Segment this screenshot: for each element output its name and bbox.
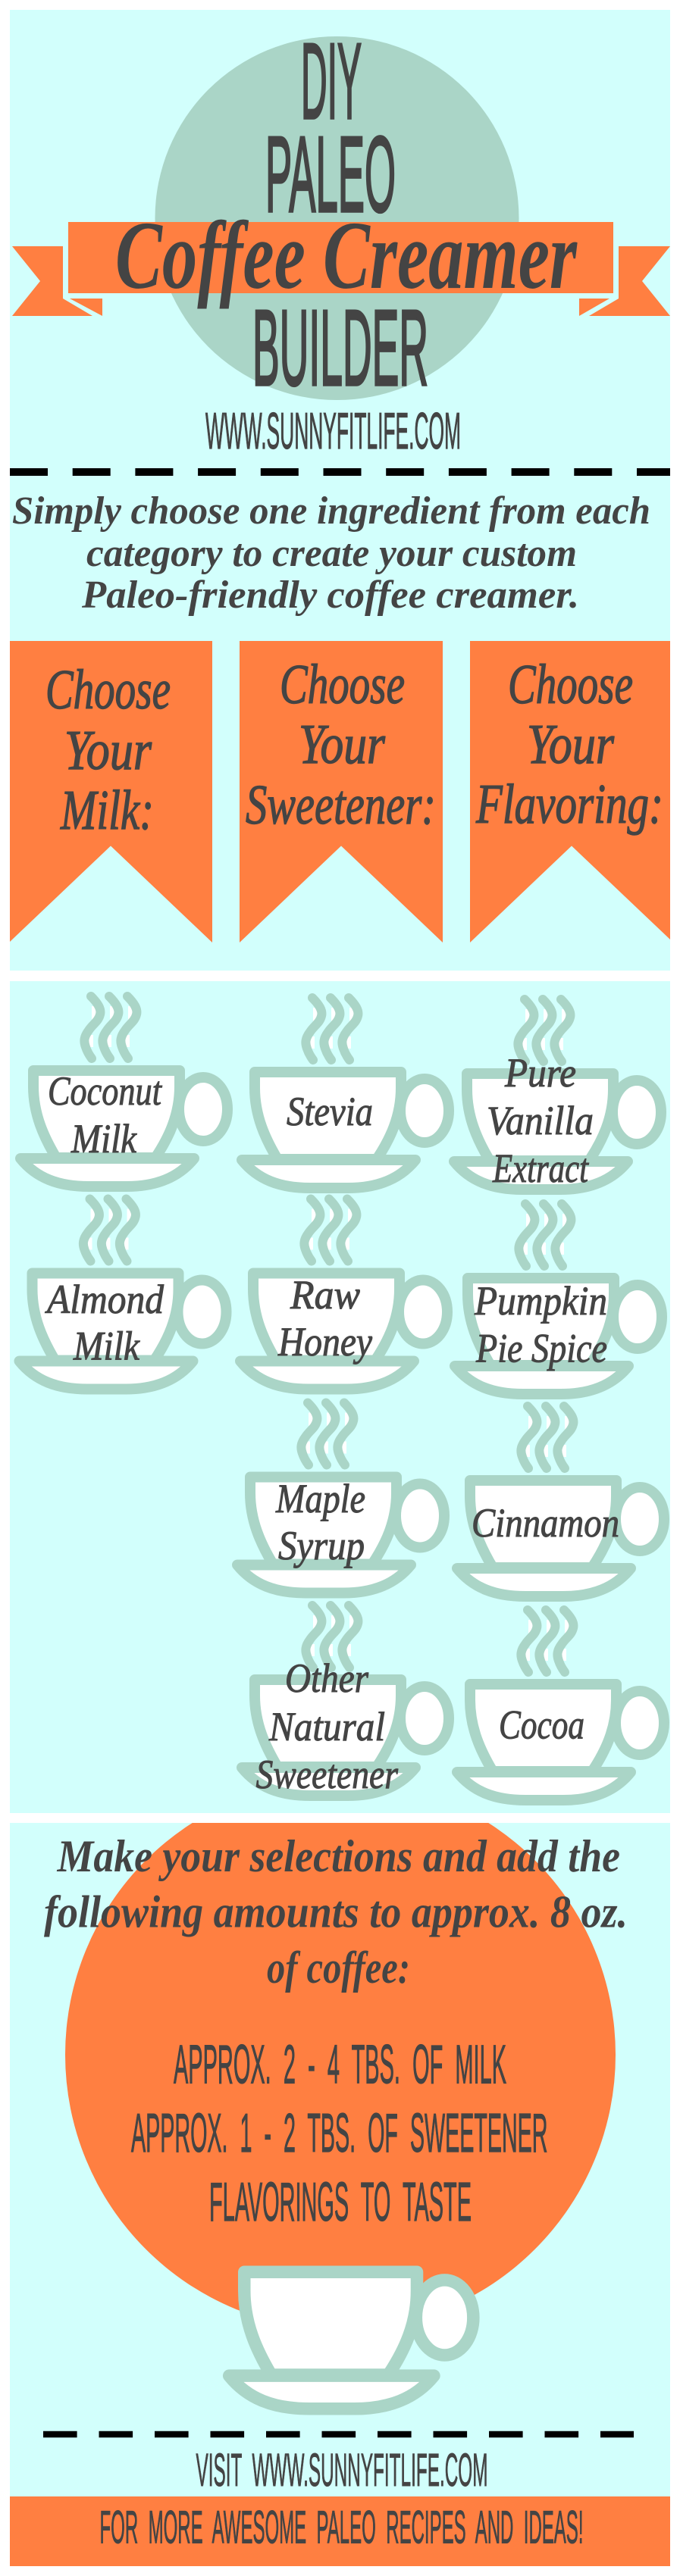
- cup: pure vanilla extract: Vanilla: [487, 1098, 594, 1143]
- cup: cinnamon: Cinnamon: [472, 1500, 619, 1546]
- cup: pure vanilla extract: [454, 999, 661, 1191]
- cup: cocoa: Cocoa: [499, 1702, 584, 1747]
- cup: pumpkin pie spice: Pie Spice: [475, 1326, 607, 1371]
- panel: header and category banners: PALEO: [265, 114, 396, 235]
- instructions text: of coffee:: [267, 1943, 410, 1993]
- banner: choose your flavoring: Choose: [508, 654, 633, 716]
- cup: maple syrup: Maple: [275, 1476, 365, 1521]
- panel: header and category banners: [10, 10, 670, 971]
- dashed divider: [43, 2431, 634, 2437]
- cup: pure vanilla extract: Extract: [492, 1146, 590, 1191]
- cup: stevia: Stevia: [287, 1089, 373, 1134]
- cup: almond milk: Almond: [45, 1277, 165, 1322]
- cup: pumpkin pie spice: [455, 1204, 662, 1394]
- cup: other natural sweetener: Natural: [268, 1704, 385, 1749]
- banner: choose your milk: Choose: [45, 659, 171, 721]
- banner: choose your sweetener: Your: [299, 714, 386, 776]
- cup: maple syrup: [237, 1403, 444, 1593]
- cup: other natural sweetener: [242, 1605, 449, 1797]
- intro text: category to create your custom: [86, 532, 577, 575]
- cup: coconut milk: Milk: [71, 1116, 137, 1161]
- instructions text: Make your selections and add the: [57, 1831, 620, 1881]
- banner: choose your milk: Milk:: [60, 780, 154, 842]
- intro text: Simply choose one ingredient from each: [12, 489, 650, 533]
- cup: cinnamon: [457, 1406, 664, 1596]
- orange circle: [65, 1823, 616, 2311]
- cup: pumpkin pie spice: Pumpkin: [474, 1278, 607, 1324]
- banner: choose your flavoring: [470, 641, 670, 943]
- footer bar: [10, 2496, 670, 2566]
- banner: choose your milk: [10, 641, 212, 943]
- banner: choose your sweetener: [240, 641, 443, 943]
- cup: raw honey: Honey: [277, 1319, 372, 1365]
- intro text: Paleo-friendly coffee creamer.: [81, 574, 579, 617]
- cup: almond milk: [20, 1199, 226, 1390]
- cup: almond milk: Milk: [73, 1323, 140, 1368]
- instructions text: following amounts to approx. 8 oz.: [44, 1887, 628, 1937]
- ribbon: main band: [68, 222, 613, 293]
- cup: coconut milk: Coconut: [48, 1068, 163, 1114]
- cup: other natural sweetener: Sweetener: [256, 1752, 399, 1797]
- ribbon: left tail: [12, 246, 102, 316]
- banner: choose your flavoring: Your: [527, 714, 615, 776]
- cup: other natural sweetener: Other: [285, 1655, 369, 1701]
- ribbon: right tail: [579, 246, 670, 316]
- instructions text: [44, 1831, 628, 1993]
- banner: choose your sweetener: Choose: [280, 654, 405, 716]
- panel: ingredient cups: [10, 981, 670, 1813]
- dashed divider: [10, 468, 670, 476]
- panel: header and category banners: DIY: [301, 21, 362, 142]
- cup: raw honey: [240, 1199, 447, 1390]
- cup: pure vanilla extract: Pure: [504, 1050, 576, 1096]
- banner: choose your sweetener: Sweetener:: [246, 774, 436, 836]
- intro text: [12, 489, 650, 617]
- title circle: [155, 36, 519, 400]
- cup: coconut milk: [20, 996, 227, 1186]
- large coffee cup: [229, 2272, 473, 2409]
- cup: cocoa: [457, 1610, 664, 1800]
- cup: maple syrup: Syrup: [278, 1523, 365, 1568]
- cup: raw honey: Raw: [290, 1272, 360, 1318]
- cup: stevia: [242, 998, 449, 1188]
- panel: amounts and footer: [10, 1780, 670, 2566]
- banner: choose your milk: Your: [64, 720, 152, 782]
